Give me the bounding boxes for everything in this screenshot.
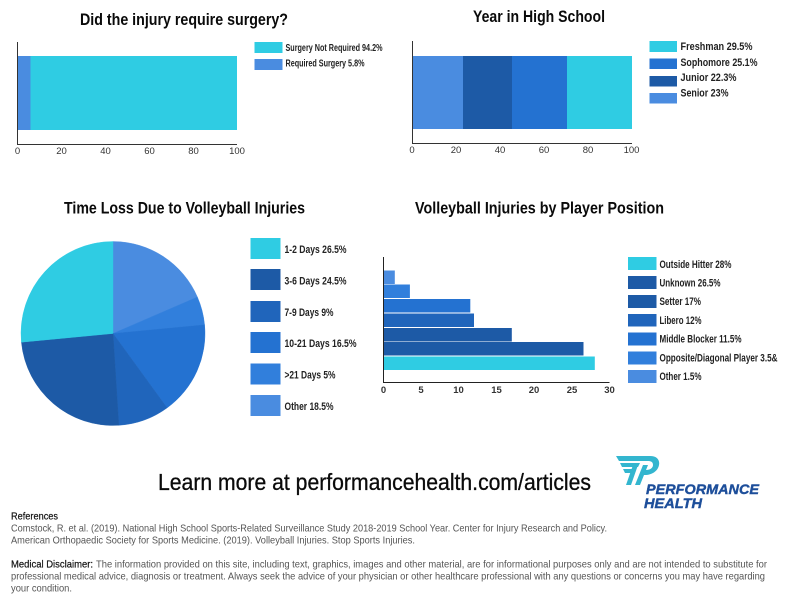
text: logo wordmark: PERFORMANCE xyxy=(646,481,760,497)
heading: time loss: Time Loss Due to Volleyball Injuries xyxy=(64,198,305,218)
legend: year: Sophomore 25.1% xyxy=(680,57,758,69)
legend: position: Libero 12% xyxy=(660,315,702,327)
heading: year: Year in High School xyxy=(473,7,605,26)
axes: year xyxy=(409,41,639,156)
references: American Orthopaedic Society for Sports Medicine. (2019). Volleyball Injuries. Stop Sports Injuries. xyxy=(11,534,415,546)
axes: surgery: 20 xyxy=(56,146,67,157)
text: logo wordmark xyxy=(644,481,760,511)
references: Comstock, R. et al. (2019). National High School Sports-Related Surveillance Study 2018-2019 School Year. Center for Injury Research and Policy. xyxy=(11,522,607,534)
axes: surgery xyxy=(15,42,245,157)
legend: position: Unknown 26.5% xyxy=(660,278,721,290)
axes: year: 60 xyxy=(539,145,549,156)
logo: Performance Health xyxy=(616,456,760,511)
medical disclaimer: Medical Disclaimer: xyxy=(11,558,93,570)
legend: year xyxy=(650,41,758,104)
medical disclaimer xyxy=(11,558,767,594)
axes: surgery: 0 xyxy=(15,146,20,157)
legend: time loss: Other 18.5% xyxy=(284,401,334,413)
call to action: Learn more at performancehealth.com/articles xyxy=(158,469,591,495)
axes: year: 100 xyxy=(624,145,639,156)
heading: position: Volleyball Injuries by Player Position xyxy=(415,198,664,218)
legend: position: Outside Hitter 28% xyxy=(660,259,732,271)
references: References xyxy=(11,510,58,522)
axes: year: 20 xyxy=(451,145,461,156)
stacked bar: surgery xyxy=(18,56,237,130)
axes: position: 0 xyxy=(381,385,386,396)
legend: year: Freshman 29.5% xyxy=(680,41,753,53)
axes: position: 5 xyxy=(418,385,424,396)
legend: time loss: 3-6 Days 24.5% xyxy=(284,276,347,288)
axes: year: 40 xyxy=(495,145,505,156)
legend: time loss: 10-21 Days 16.5% xyxy=(284,338,357,350)
axes: position: 30 xyxy=(604,385,615,396)
legend: time loss: >21 Days 5% xyxy=(284,370,336,382)
legend: position: Other 1.5% xyxy=(660,371,702,383)
horizontal bar chart xyxy=(384,270,595,370)
legend: time loss: 7-9 Days 9% xyxy=(284,307,334,319)
axes: position: 10 xyxy=(453,385,464,396)
axes: year: 0 xyxy=(409,145,415,156)
pie chart xyxy=(21,241,205,425)
medical disclaimer: your condition. xyxy=(11,582,72,594)
axes: position xyxy=(381,257,615,396)
legend: surgery: Surgery Not Required 94.2% xyxy=(286,43,383,54)
panel: time loss pie chart xyxy=(21,198,357,425)
axes: surgery: 100 xyxy=(229,146,245,157)
legend: surgery: Required Surgery 5.8% xyxy=(286,58,365,70)
axes: year: 80 xyxy=(583,145,593,156)
panel: player position chart xyxy=(381,198,778,396)
legend: surgery xyxy=(254,42,383,70)
legend: position: Setter 17% xyxy=(660,296,701,308)
axes: position: 15 xyxy=(491,385,502,396)
axes: position: 25 xyxy=(567,385,578,396)
references xyxy=(11,510,607,546)
panel: surgery chart xyxy=(15,10,383,157)
legend: position xyxy=(628,257,778,383)
axes: surgery: 80 xyxy=(188,146,199,157)
axes: surgery: 60 xyxy=(144,146,155,157)
text: logo wordmark: HEALTH xyxy=(644,495,703,511)
icon: PH mark xyxy=(616,456,659,485)
legend: year: Senior 23% xyxy=(680,88,729,100)
axes: position: 20 xyxy=(529,385,539,396)
legend: time loss: 1-2 Days 26.5% xyxy=(284,244,347,256)
panel: year in high school chart xyxy=(409,7,758,156)
legend: year: Junior 22.3% xyxy=(680,72,737,84)
stacked bar: year xyxy=(412,56,632,129)
legend: position: Middle Blocker 11.5% xyxy=(660,334,742,346)
axes: surgery: 40 xyxy=(100,146,111,157)
heading: surgery: Did the injury require surgery? xyxy=(80,10,288,29)
legend: time loss xyxy=(250,238,357,416)
